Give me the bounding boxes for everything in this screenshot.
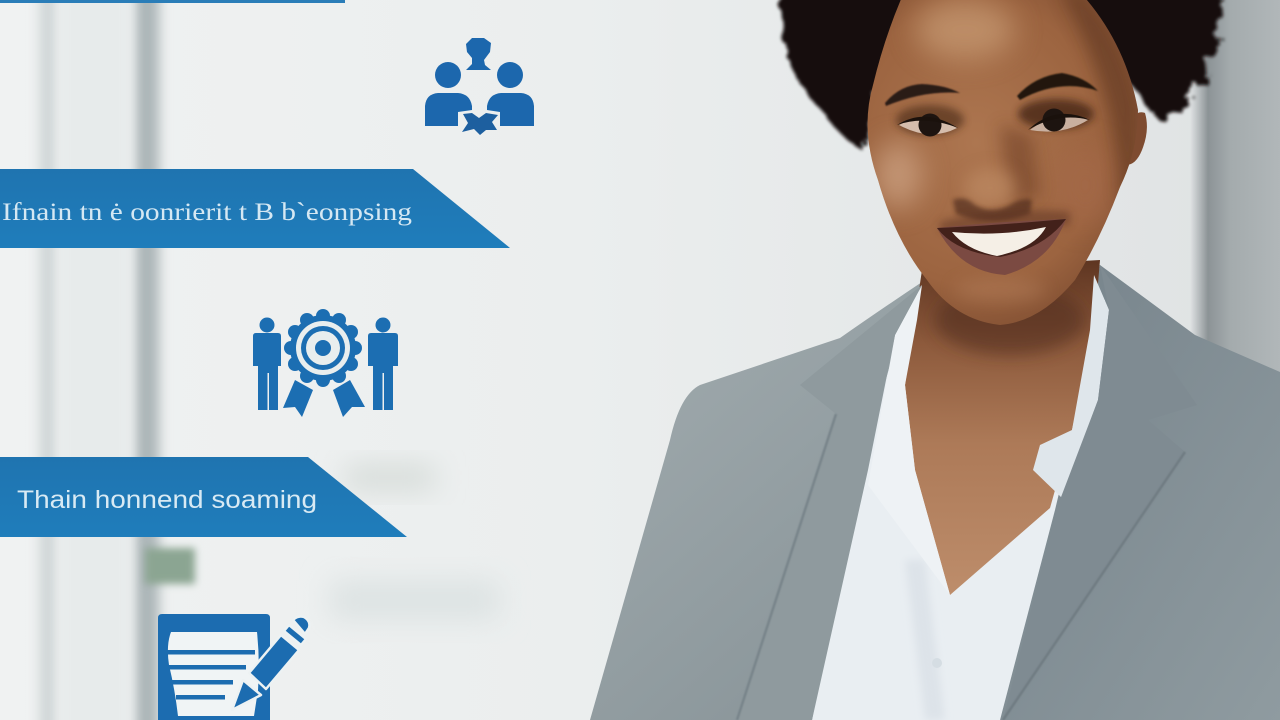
right cheek [1107, 195, 1117, 218]
icon part: right person [368, 318, 398, 410]
cheek highlight [874, 141, 922, 209]
banner: first label: Ifnain tn ė oonrierit t B b`eonpsing [2, 199, 413, 226]
icon part: rosette [284, 309, 362, 387]
icon: award rosette with two people [253, 309, 398, 417]
neck and chest [905, 260, 1100, 595]
left eye [897, 114, 958, 136]
icon: two people with handshake [425, 38, 534, 135]
icon part: left person [253, 318, 281, 410]
nose [1000, 125, 1040, 205]
shaded hair edge [1060, 0, 1138, 200]
eyebrows [885, 84, 960, 106]
blazer lapels [737, 265, 1197, 720]
ear [1129, 112, 1147, 164]
chin shade [970, 282, 1035, 300]
hair [775, 0, 1225, 150]
forehead highlight [915, 0, 1015, 60]
banner: second label: Thain honnend soaming [17, 486, 317, 514]
icon part: pencil [232, 616, 309, 710]
icon part: rosette ribbons [283, 380, 313, 417]
top accent bar [0, 0, 345, 3]
banner: first label [0, 169, 510, 248]
shirt [812, 300, 1105, 720]
blazer: back and shoulders [590, 265, 1280, 720]
banner: second label [0, 457, 407, 537]
shirt collars [868, 275, 1109, 595]
icon: document and pencil [158, 614, 309, 720]
eye shadows [896, 105, 964, 135]
icon part: raised fist [466, 38, 491, 70]
lips [937, 219, 1066, 275]
mouth shade [937, 219, 1066, 257]
smile shadow [940, 210, 1070, 232]
face [868, 0, 1138, 325]
teeth [952, 227, 1046, 256]
right eye [1028, 108, 1090, 132]
portrait: smiling woman in grey blazer [590, 0, 1280, 720]
